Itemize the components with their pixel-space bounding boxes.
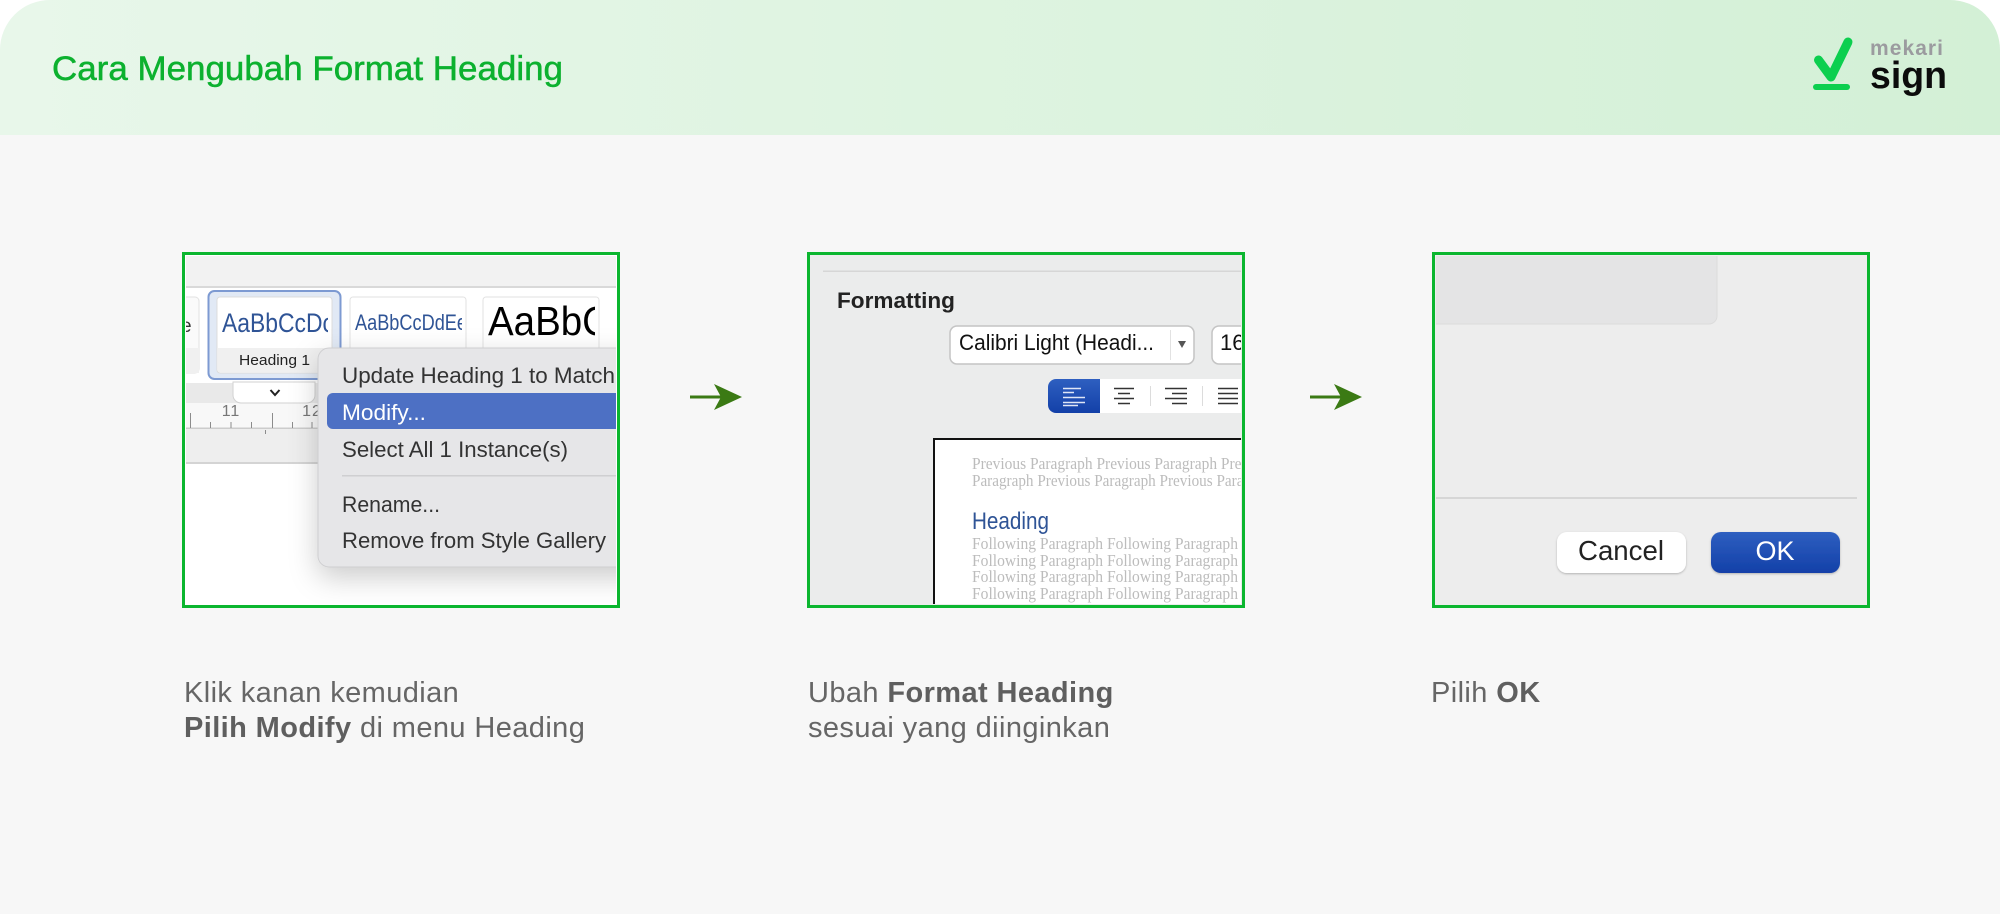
button: Cancel: Cancel [1578,535,1664,566]
button: OK [1711,532,1840,573]
button: OK: OK [1755,536,1795,566]
font select [950,326,1194,364]
ruler strip [186,383,318,464]
caption: step 1: di menu Heading [360,712,585,744]
context menu: Select All 1 Instance(s) [342,437,568,462]
panel: step 3 screenshot [1420,240,1870,608]
heading: Formatting: Formatting [837,288,955,313]
arrow: step 2 to 3 [1310,384,1362,410]
previous style box: e [181,316,192,337]
logo: mekari sign: mekari [1870,37,1943,60]
style: Heading 1 selected: AaBbCcDc [222,308,334,338]
style: Heading 2: AaBbCcDdEe [355,310,467,335]
previous style box [186,296,200,374]
caption: step 1: Pilih Modify [184,712,352,744]
arrow: step 1 to 2 [690,384,742,410]
ruler strip: 12 [302,403,322,420]
style: Heading 1 selected: Heading 1 [239,352,310,369]
caption: step 2: Ubah Format Heading [808,677,1114,709]
preview box [933,438,1241,604]
context menu: Modify... [342,400,426,425]
ruler strip: 11 [222,403,240,420]
panel: step 2 screenshot [807,252,1245,608]
preview box: Following Paragraph Following Paragraph [972,551,1239,570]
menu highlight: Modify [327,393,647,429]
alignment buttons [1048,379,1241,413]
context menu: Update Heading 1 to Match [342,363,615,388]
context menu: Remove from Style Gallery [342,528,606,553]
logo: mekari sign [1816,37,1947,97]
size select [1211,325,1241,365]
caption: step 1: Klik kanan kemudian [184,677,459,709]
size select: 16 [1220,330,1244,355]
style: Heading 1 selected [208,291,340,379]
context menu [318,348,658,567]
font select: Calibri Light (Headi... [959,330,1154,355]
panel: step 1 screenshot [182,252,620,608]
title: Cara Mengubah Format Heading [52,50,563,88]
preview box: Heading [972,508,1049,535]
style: Title: AaBbC [488,298,610,344]
header band [0,0,2000,135]
preview box: Following Paragraph Following Paragraph [972,567,1239,586]
preview box: Following Paragraph Following Paragraph [972,584,1239,603]
preview box: Previous Paragraph Previous Paragraph Previous [972,454,1275,473]
context menu: Rename... [342,492,440,517]
preview box: Following Paragraph Following Paragraph [972,534,1239,553]
dropdown tab with chevron [233,382,315,403]
logo: mekari sign: sign [1870,55,1947,97]
style: Heading 2 [350,296,466,348]
caption: step 2: sesuai yang diinginkan [808,712,1110,744]
caption: step 3: Pilih OK [1431,677,1541,709]
button: Cancel [1557,532,1686,573]
preview box: Paragraph Previous Paragraph Previous Paragraph [972,471,1279,490]
